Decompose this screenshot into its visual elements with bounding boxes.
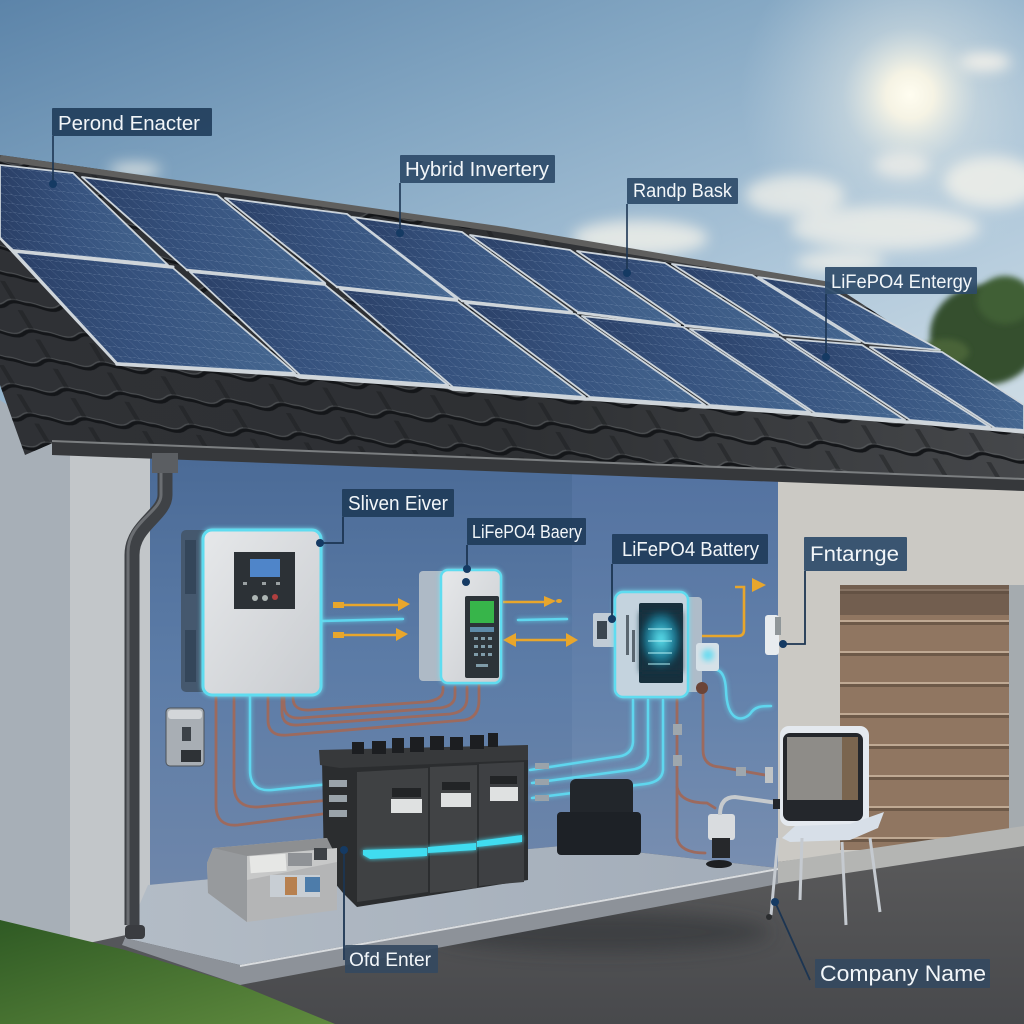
blue wall right section [572,465,778,868]
label: LiFePO4 Entergy: LiFePO4 Entergy [831,272,972,293]
left wall [0,400,70,947]
black storage boxes [557,779,641,855]
sidewalk strip [775,826,1024,884]
garage wall [778,475,1024,862]
ground: asphalt [240,845,1024,1024]
label: LiFePO4 Baery: LiFePO4 Baery [472,522,582,542]
corner column [70,445,150,947]
label: Ofd Enter: Ofd Enter [349,950,432,971]
inverter one [181,530,321,695]
roof tiles [0,155,1024,482]
grass [0,920,335,1024]
asphalt shadow [430,912,770,952]
inverter two [419,570,501,683]
blue wall left section [150,450,572,885]
label: Company Name [771,898,990,988]
generator unit [207,838,337,922]
label: Sliven Eiver [316,489,454,547]
label: Company Name: Company Name [820,961,986,986]
tree [921,276,1024,385]
copper and coolant wiring [216,619,771,853]
junction box [696,643,719,671]
desk monitor and chair [766,726,884,925]
battery bank [319,733,549,907]
solar panel array [0,165,1024,432]
small sensor box [593,613,615,647]
label: LiFePO4 Battery: LiFePO4 Battery [622,539,759,561]
label: LiFePO4 Battery [608,534,768,623]
label: Perond Enacter: Perond Enacter [58,113,200,135]
label: Fntarnge: Fntarnge [810,543,899,566]
label: LiFePO4 Entergy [822,267,977,361]
battery controller [615,592,702,697]
small wall isolator [166,708,204,766]
clamps [673,682,773,783]
garage door [840,585,1024,850]
flow arrows [333,578,766,647]
wall sensor [765,615,781,655]
label: LiFePO4 Baery [462,518,586,586]
label: Ofd Enter [340,846,438,973]
ground base [0,860,1024,1024]
downpipe [125,453,178,939]
label: Hybrid Invertery: Hybrid Invertery [405,159,549,181]
clouds [109,53,1024,272]
sky [0,0,1024,520]
pump [706,797,781,868]
label: Randp Bask [623,178,738,277]
label: Sliven Eiver: Sliven Eiver [348,493,448,515]
concrete slab [122,845,778,985]
label: Perond Enacter [49,108,212,188]
gutter [52,440,1024,491]
label: Randp Bask: Randp Bask [633,181,732,202]
label: Fntarnge [779,537,907,648]
ridge cap [0,158,830,285]
label: Hybrid Invertery [396,155,555,237]
